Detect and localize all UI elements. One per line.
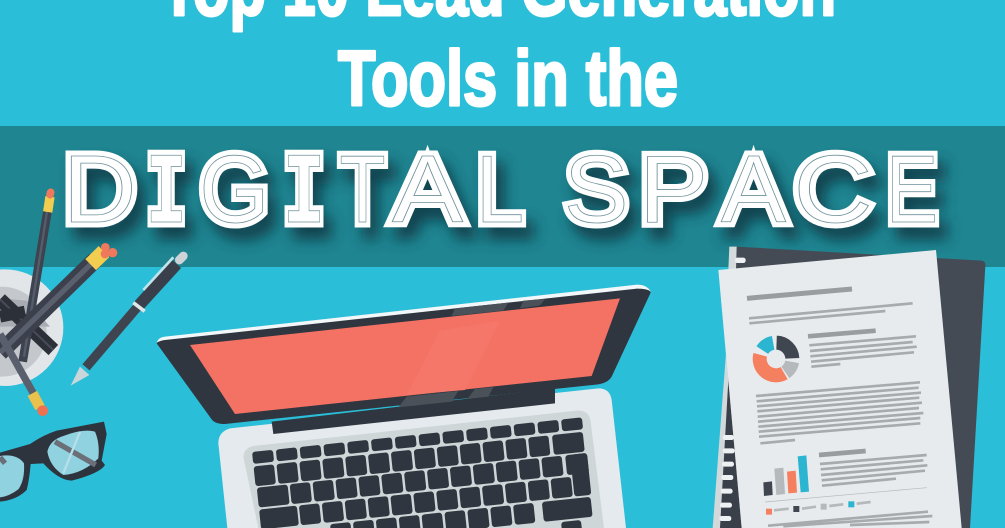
banner heading: DIGITAL SPACE: G [208, 148, 277, 255]
banner heading: DIGITAL SPACE: E [886, 136, 938, 243]
banner heading: DIGITAL SPACE: I [146, 139, 186, 253]
keyboard keys [252, 417, 596, 528]
banner heading: DIGITAL SPACE: L [484, 148, 532, 255]
heading: second line: Tools in the [338, 34, 678, 122]
screen glare [407, 321, 500, 395]
banner heading: DIGITAL SPACE: D [63, 136, 136, 243]
banner heading: DIGITAL SPACE: P [639, 136, 708, 243]
banner heading: DIGITAL SPACE: C [794, 136, 872, 243]
banner heading: DIGITAL SPACE: C [794, 136, 872, 243]
bar chart [763, 455, 927, 502]
banner heading: DIGITAL SPACE: G [200, 136, 269, 243]
banner heading: DIGITAL SPACE: L [476, 136, 524, 243]
banner heading: DIGITAL SPACE: C [802, 148, 880, 255]
banner heading: DIGITAL SPACE: E [886, 136, 938, 243]
icon: fountain pen [71, 256, 183, 386]
banner heading: DIGITAL SPACE: I [146, 139, 186, 253]
closing paragraph [768, 512, 932, 526]
banner heading: DIGITAL SPACE: A [392, 136, 463, 243]
icon: upright pencil [23, 192, 51, 362]
spiral binding [713, 353, 742, 528]
banner heading: DIGITAL SPACE: P [647, 148, 716, 255]
banner heading: DIGITAL SPACE: A [729, 148, 794, 255]
laptop hinge [272, 388, 555, 434]
lid highlight [157, 285, 651, 343]
paper sheet [718, 250, 962, 528]
banner band [0, 126, 1005, 267]
bezel glints [398, 299, 545, 407]
banner heading: DIGITAL SPACE: I [283, 139, 325, 253]
laptop base [218, 388, 626, 528]
banner heading: DIGITAL SPACE: P [639, 136, 708, 243]
donut caption [808, 331, 917, 367]
banner heading: DIGITAL SPACE: T [340, 136, 386, 243]
banner heading: DIGITAL SPACE: D [63, 136, 136, 243]
laptop [157, 285, 651, 528]
banner heading: DIGITAL SPACE: D [71, 148, 144, 255]
report heading and intro [747, 289, 913, 323]
banner heading: DIGITAL SPACE: T [340, 136, 386, 243]
banner heading: DIGITAL SPACE: I [283, 139, 325, 253]
bar chart caption [819, 451, 927, 486]
banner heading: DIGITAL SPACE: A [721, 136, 786, 243]
banner heading: DIGITAL SPACE: A [392, 136, 463, 243]
icon: pencil bundle [0, 243, 117, 353]
body paragraph [756, 382, 923, 443]
banner heading: DIGITAL SPACE: S [564, 136, 628, 243]
banner heading: DIGITAL SPACE: E [894, 148, 946, 255]
keyboard well [243, 411, 604, 528]
banner heading: DIGITAL SPACE [63, 136, 946, 265]
banner heading: DIGITAL SPACE: S [572, 148, 636, 255]
spiral top [728, 247, 746, 270]
banner heading: DIGITAL SPACE: G [200, 136, 269, 243]
icon: glasses [0, 422, 107, 502]
document stack [713, 247, 985, 528]
icon: pencil cup, pencils, pen and glasses [0, 192, 183, 502]
donut chart [760, 343, 792, 375]
banner heading: DIGITAL SPACE: I [291, 151, 333, 265]
banner heading: DIGITAL SPACE: T [348, 148, 394, 255]
banner heading: DIGITAL SPACE: S [564, 136, 628, 243]
icon: lower pencil [0, 334, 48, 416]
banner heading: DIGITAL SPACE: L [476, 136, 524, 243]
laptop screen [190, 298, 620, 414]
laptop lid [157, 287, 651, 424]
banner heading: DIGITAL SPACE: A [400, 148, 471, 255]
chart legend [766, 501, 871, 515]
banner heading: DIGITAL SPACE: A [721, 136, 786, 243]
icon: pencil cup [0, 269, 63, 386]
banner heading: DIGITAL SPACE: I [154, 151, 194, 265]
dark folder [720, 247, 985, 528]
